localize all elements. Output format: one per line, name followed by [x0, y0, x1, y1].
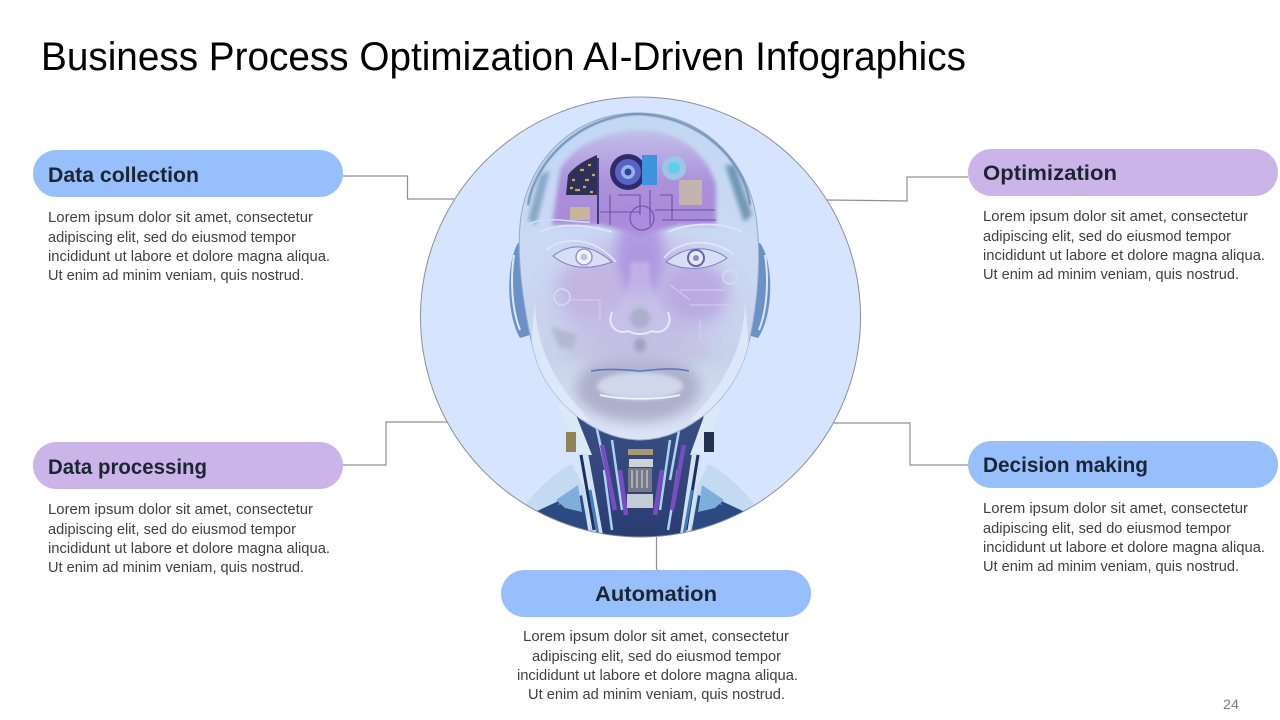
body text [48, 210, 330, 284]
body text: Lorem ipsum dolor sit amet, consectetur [983, 209, 1248, 225]
body text: adipiscing elit, sed do eiusmod tempor [48, 522, 296, 538]
small cyan disc [662, 156, 686, 180]
lips [591, 369, 689, 400]
pill heading [33, 442, 343, 489]
connector: data processing [343, 422, 449, 465]
panel: automation [501, 570, 811, 703]
beige chip [679, 180, 702, 205]
right eye [664, 243, 734, 268]
connector: data collection [343, 176, 454, 199]
page number: 24 [1223, 696, 1239, 712]
dark circuit chip [566, 155, 599, 224]
circle background [420, 97, 860, 537]
body text: adipiscing elit, sed do eiusmod tempor [983, 521, 1231, 537]
forehead lines [540, 224, 742, 232]
body text: Ut enim ad minim veniam, quis nostrud. [48, 268, 304, 284]
body text: adipiscing elit, sed do eiusmod tempor [48, 230, 296, 246]
connector: optimization [827, 177, 968, 201]
body text: Lorem ipsum dolor sit amet, consectetur [523, 629, 789, 645]
body text: Ut enim ad minim veniam, quis nostrud. [528, 687, 785, 703]
head interior details [527, 114, 752, 422]
heading text: Automation [595, 583, 717, 606]
left eye [546, 241, 616, 267]
body text: Lorem ipsum dolor sit amet, consectetur [48, 502, 313, 518]
body text [517, 629, 798, 703]
circuit traces [600, 190, 716, 230]
pill heading [501, 570, 811, 617]
body text: incididunt ut labore et dolore magna aliqua. [983, 248, 1265, 264]
robot figure [509, 113, 770, 540]
connector: decision making [834, 423, 968, 465]
body text: incididunt ut labore et dolore magna aliqua. [517, 668, 798, 684]
body text: Lorem ipsum dolor sit amet, consectetur [48, 210, 313, 226]
body text: incididunt ut labore et dolore magna aliqua. [48, 541, 330, 557]
blue column [642, 155, 657, 185]
panel: data processing [33, 442, 343, 576]
title: Business Process Optimization AI-Driven Infographics [41, 35, 966, 79]
cranium edge highlights [528, 114, 752, 225]
body text [983, 501, 1265, 575]
body text: Lorem ipsum dolor sit amet, consectetur [983, 501, 1248, 517]
head shell [519, 113, 759, 440]
pill heading [33, 150, 343, 197]
panel: optimization [968, 149, 1278, 283]
heading text: Decision making [983, 454, 1148, 477]
panel: data collection [33, 150, 343, 284]
body text [48, 502, 330, 576]
heading text: Optimization [983, 162, 1117, 185]
body text: Ut enim ad minim veniam, quis nostrud. [983, 267, 1239, 283]
face circuit traces [568, 285, 730, 340]
pill heading [968, 441, 1278, 488]
purple brain glow [552, 130, 716, 235]
connector: automation [656, 537, 658, 570]
pill heading [968, 149, 1278, 196]
speaker disc [610, 154, 642, 190]
cheek and chin shading [530, 300, 750, 422]
body text [983, 209, 1265, 283]
body text: adipiscing elit, sed do eiusmod tempor [532, 649, 781, 665]
heading text: Data collection [48, 164, 199, 187]
ears [509, 243, 770, 338]
nose [609, 262, 671, 352]
purple face glow [549, 229, 736, 340]
body text: Ut enim ad minim veniam, quis nostrud. [983, 559, 1239, 575]
body text: incididunt ut labore et dolore magna aliqua. [48, 249, 330, 265]
heading text: Data processing [48, 456, 207, 479]
neck [566, 416, 714, 536]
body text: adipiscing elit, sed do eiusmod tempor [983, 229, 1231, 245]
shoulders [526, 464, 754, 530]
cheek rings [554, 270, 737, 305]
body text: Ut enim ad minim veniam, quis nostrud. [48, 560, 304, 576]
body text: incididunt ut labore et dolore magna aliqua. [983, 540, 1265, 556]
panel: decision making [968, 441, 1278, 575]
central robot head illustration [420, 97, 860, 540]
circle outline [420, 97, 860, 537]
